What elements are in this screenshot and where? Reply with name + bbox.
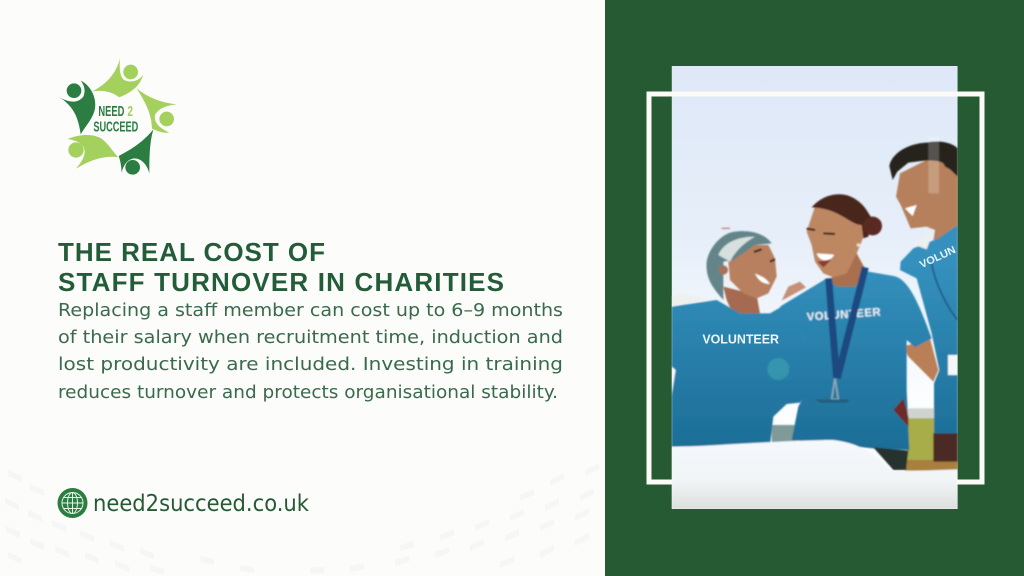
- logo wordmark: [93, 103, 138, 136]
- white frame: [649, 94, 982, 482]
- figure: bottom dark green: [119, 129, 153, 175]
- figure: left dark green: [58, 81, 95, 134]
- website link: need2succeed.co.uk: [93, 491, 310, 517]
- logo wordmark: SUCCEED: [93, 119, 138, 136]
- body text: lost productivity are included. Investing in training: [58, 354, 563, 375]
- foreground white cloth: [672, 440, 958, 509]
- icon: globe: [58, 488, 88, 518]
- logo: Need 2 Succeed: [58, 58, 177, 175]
- photo: three volunteers laughing: [672, 66, 958, 509]
- title: [58, 237, 504, 297]
- person: older woman, left: [672, 228, 809, 447]
- body text: [58, 300, 563, 403]
- title: STAFF TURNOVER IN CHARITIES: [58, 267, 504, 297]
- photo: three volunteers laughing: VOLUNTEER: [702, 332, 780, 347]
- logo wordmark: NEED: [98, 103, 124, 120]
- panel: right green background: [605, 0, 1024, 576]
- logo wordmark: 2: [127, 103, 133, 120]
- body text: reduces turnover and protects organisational stability.: [58, 382, 558, 403]
- website link: [58, 488, 310, 518]
- body text: of their salary when recruitment time, induction and: [58, 327, 563, 348]
- title: THE REAL COST OF: [58, 237, 325, 267]
- person: woman centre: [780, 194, 938, 470]
- photo: three volunteers laughing: VOLUN: [918, 244, 958, 271]
- figure: right light green: [137, 88, 177, 133]
- figure: top light green: [92, 58, 143, 97]
- figure: lower-left light green: [67, 135, 118, 169]
- panel: left background: [0, 0, 605, 576]
- person: woman centre: VOLUNTEER: [806, 307, 881, 324]
- body text: Replacing a staff member can cost up to 6–9 months: [58, 300, 563, 321]
- person: young man, right: [889, 137, 958, 462]
